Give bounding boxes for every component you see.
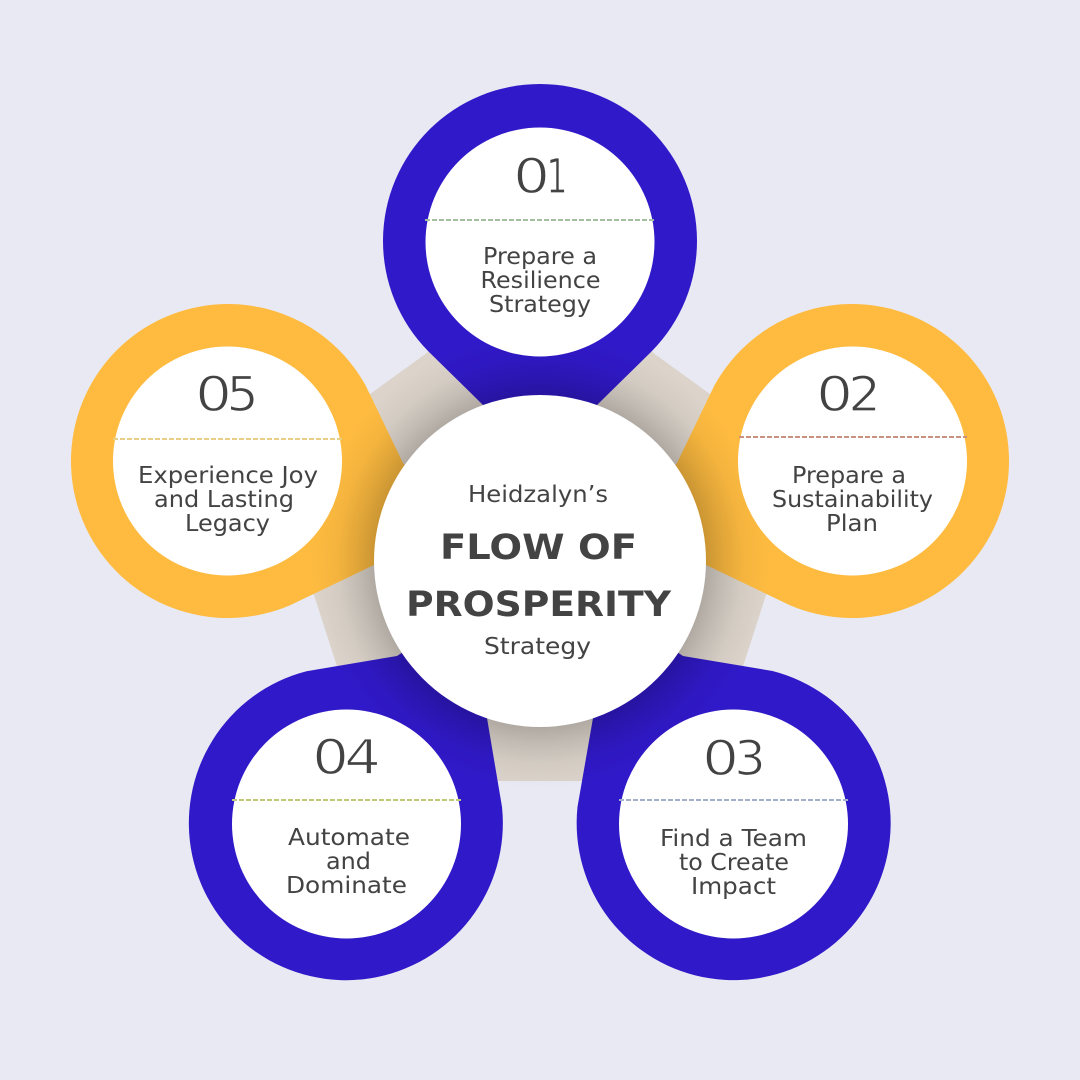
label 02: Plan — [826, 509, 878, 537]
number 02: 2 — [848, 367, 881, 423]
step 04 badge — [232, 710, 461, 938]
number 02 — [816, 367, 881, 423]
pin shape 03 — [540, 561, 891, 980]
number 05: 0 — [195, 367, 232, 423]
number 04 — [312, 730, 381, 786]
pin shape 04 — [189, 561, 540, 980]
number 02: 0 — [816, 367, 853, 423]
title line: Strategy: Strategy — [484, 632, 591, 660]
label 03: Find a Team — [660, 824, 807, 852]
number 03 — [702, 731, 766, 787]
step 02 badge — [738, 346, 967, 576]
step 05 badge — [113, 346, 342, 576]
number 04: 0 — [312, 730, 349, 786]
label 05: Legacy — [185, 509, 270, 537]
pin shape 05 — [71, 304, 480, 618]
label 05 — [138, 461, 318, 537]
number 01: 1 — [546, 149, 568, 205]
label 04 — [286, 823, 410, 899]
title line: FLOW OF: FLOW OF — [440, 528, 637, 568]
number 05: 5 — [226, 366, 259, 423]
soft shadow around centre circle — [312, 333, 768, 789]
label 01: Resilience — [480, 266, 600, 294]
step 01 badge — [425, 128, 655, 356]
label 01: Prepare a — [483, 242, 597, 270]
centre circle with title — [374, 395, 706, 727]
label 05: and Lasting — [154, 485, 294, 513]
pin shape 02 — [600, 304, 1009, 618]
label 02: Sustainability — [772, 485, 933, 513]
label 01 — [480, 242, 600, 318]
label 03: Impact — [691, 872, 776, 900]
label 03 — [660, 824, 807, 900]
pin shape 01 — [383, 84, 697, 500]
number 04: 4 — [344, 730, 381, 786]
label 03: to Create — [679, 848, 789, 876]
label 04: and — [326, 847, 371, 875]
title line: PROSPERITY: PROSPERITY — [406, 585, 672, 625]
label 04: Automate — [288, 823, 410, 851]
number 05 — [195, 366, 259, 423]
number 01: 0 — [513, 149, 550, 205]
number 01 — [513, 149, 568, 205]
label 01: Strategy — [489, 290, 591, 318]
number 03: 3 — [734, 732, 766, 787]
label 02 — [772, 461, 933, 537]
label 02: Prepare a — [792, 461, 906, 489]
label 04: Dominate — [286, 871, 407, 899]
step 03 badge — [619, 710, 848, 938]
beige pentagon behind the pins — [272, 271, 808, 781]
label 05: Experience Joy — [138, 461, 318, 489]
number 03: 0 — [702, 731, 739, 787]
title line: Heidzalyn's: Heidzalyn’s — [468, 480, 608, 508]
